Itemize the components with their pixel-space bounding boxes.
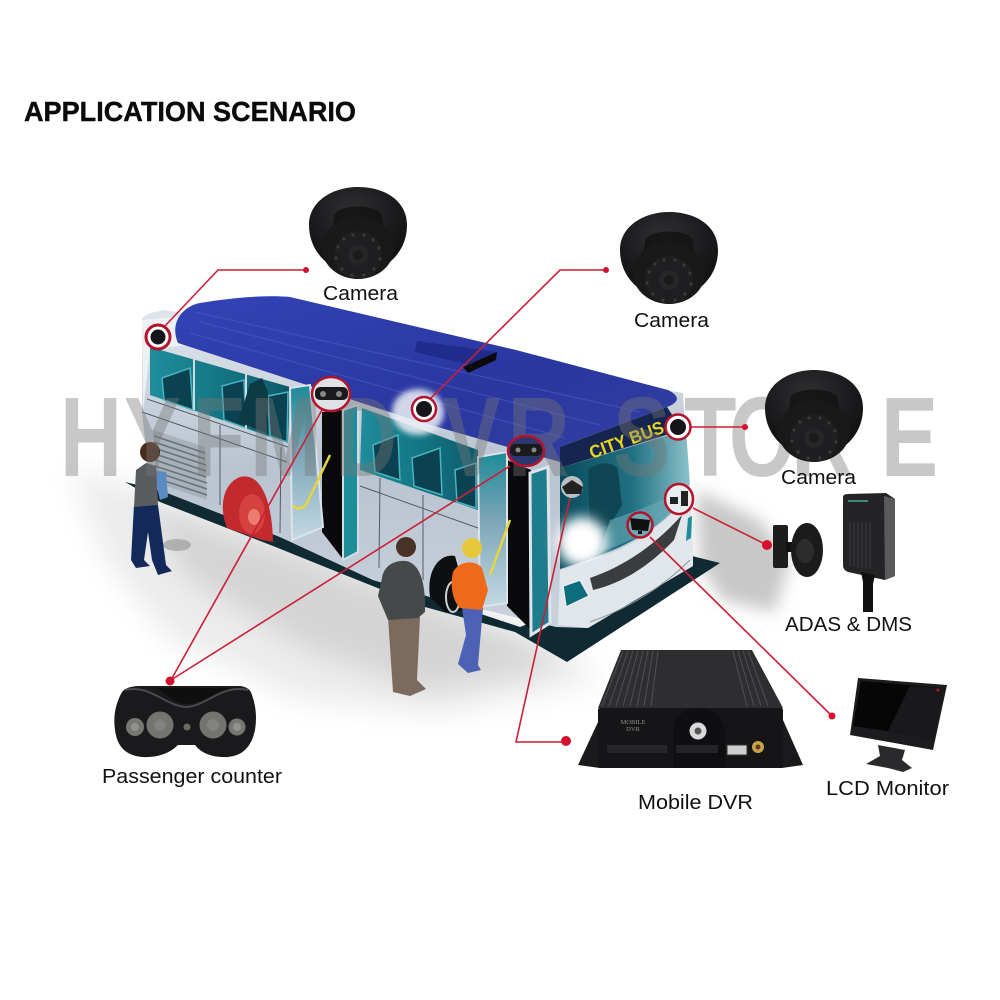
heat fins bbox=[602, 651, 768, 706]
bus marker: rear passenger counter bbox=[312, 377, 350, 411]
rear windows bbox=[150, 347, 290, 443]
top bbox=[598, 650, 783, 708]
bus marker: LCD monitor bbox=[628, 512, 652, 538]
rear door right leaf bbox=[343, 405, 358, 560]
side marker bbox=[686, 516, 692, 541]
watermark: HYF MDVR STORE bbox=[60, 375, 938, 501]
front door left leaf bbox=[478, 452, 507, 607]
flanges bbox=[578, 720, 803, 768]
front panel bbox=[598, 708, 783, 768]
label: Camera bbox=[323, 283, 399, 305]
bus marker: rear camera bbox=[146, 325, 170, 349]
label: ADAS & DMS bbox=[785, 614, 912, 636]
bumper bbox=[558, 490, 693, 628]
passenger silhouette bbox=[238, 378, 268, 434]
roof bbox=[175, 296, 677, 462]
terminals bbox=[607, 745, 667, 753]
title: APPLICATION SCENARIO bbox=[24, 96, 356, 127]
bus body bbox=[142, 310, 693, 628]
vent grille bbox=[153, 430, 207, 500]
sign band bbox=[560, 407, 682, 468]
label: Camera bbox=[781, 467, 857, 489]
camera top-left bbox=[309, 187, 407, 305]
rear door left leaf bbox=[290, 385, 323, 540]
worker side handrail bbox=[490, 520, 510, 575]
corner glow bbox=[392, 389, 444, 435]
man with vest bbox=[131, 442, 191, 575]
roof vent bbox=[415, 341, 498, 373]
lock arch bbox=[673, 708, 725, 768]
bus marker: front passenger counter bbox=[508, 436, 544, 466]
headlight glare bbox=[557, 517, 607, 567]
bus marker: ADAS and DMS bbox=[665, 484, 693, 514]
body panel lines bbox=[142, 399, 478, 580]
lock bbox=[690, 722, 706, 740]
product marking line two: DVR bbox=[626, 726, 641, 733]
ADAS camera bbox=[773, 523, 823, 577]
AV port bbox=[752, 741, 764, 753]
callout lines bbox=[165, 270, 832, 742]
windshield bbox=[560, 430, 690, 569]
bus bbox=[125, 296, 720, 662]
window frames bbox=[194, 358, 246, 430]
second door opening bbox=[507, 460, 531, 630]
middle seats bbox=[373, 435, 476, 508]
worker in orange bbox=[452, 538, 488, 673]
dashboard bbox=[600, 488, 686, 552]
label: Camera bbox=[634, 310, 710, 332]
front door right leaf bbox=[530, 467, 550, 635]
label: Mobile DVR bbox=[638, 792, 753, 814]
red rear wheel bbox=[223, 476, 273, 542]
camera top-centre bbox=[620, 212, 718, 332]
callout dots bbox=[166, 267, 836, 746]
bus shadow bbox=[125, 482, 720, 662]
LCD monitor bbox=[826, 678, 949, 800]
passenger counter bbox=[102, 686, 282, 788]
mobile DVR bbox=[578, 650, 803, 814]
front grille strip bbox=[590, 515, 682, 590]
ADAS and DMS bbox=[773, 493, 912, 636]
man in jacket bbox=[378, 537, 426, 696]
roof stripes bbox=[190, 312, 640, 438]
card slot bbox=[676, 745, 718, 753]
label: Passenger counter bbox=[102, 766, 282, 788]
bus marker: middle camera bbox=[412, 397, 436, 421]
rear door opening bbox=[322, 410, 343, 558]
USB port bbox=[727, 745, 747, 755]
yellow handrail bbox=[293, 455, 330, 508]
label: LCD Monitor bbox=[826, 778, 949, 800]
bumper strip bbox=[590, 560, 690, 622]
bus marker: DVR bbox=[561, 476, 583, 498]
product marking: MOBILE bbox=[621, 719, 645, 726]
DMS device bbox=[843, 493, 895, 612]
headlamp bbox=[563, 580, 589, 607]
front wheel bbox=[429, 556, 470, 612]
bus marker: front camera bbox=[666, 414, 690, 440]
ground bbox=[70, 470, 790, 715]
destination sign: CITY BUS bbox=[587, 417, 667, 463]
camera right bbox=[765, 370, 863, 489]
driver seat bbox=[588, 463, 622, 530]
middle windows bbox=[360, 408, 478, 510]
rear seats bbox=[162, 368, 288, 442]
rear glow bbox=[142, 316, 185, 412]
